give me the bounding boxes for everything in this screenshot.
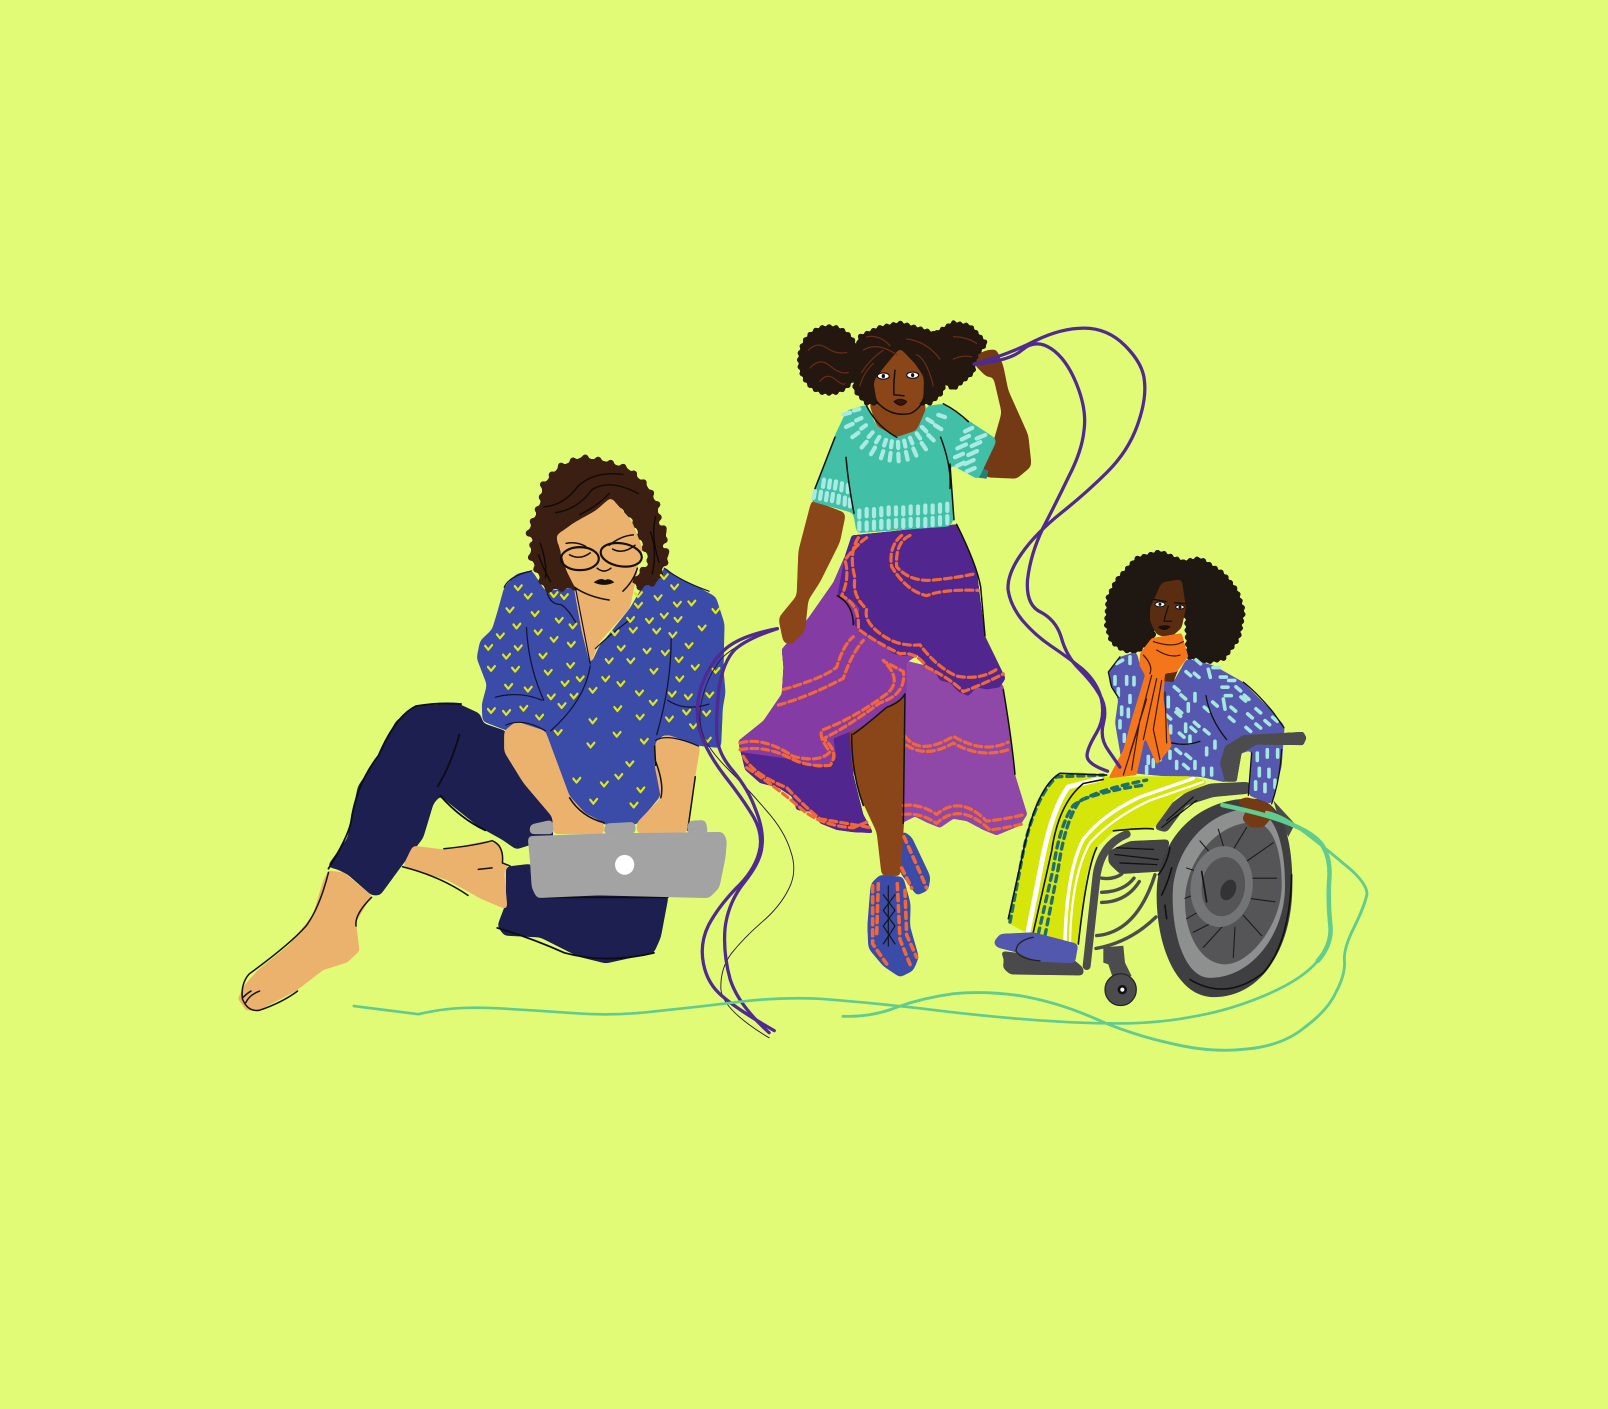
right eye: [907, 372, 919, 378]
left pupil: [882, 374, 885, 378]
guard hatching: [1162, 797, 1197, 827]
laptop keyboard edge left: [529, 820, 554, 834]
seat hatching: [1115, 848, 1158, 865]
footrest: [1000, 951, 1084, 975]
trousers: [1007, 772, 1211, 945]
forearm outlines: [570, 746, 695, 830]
wheel axle: [1217, 877, 1239, 903]
purple strand: left fine line: [700, 631, 794, 1038]
hair right: [1180, 559, 1243, 662]
face: [1150, 579, 1186, 638]
wheel spokes: [1185, 827, 1277, 958]
lips: [1158, 625, 1171, 630]
figure: woman in purple skirt: [738, 322, 1032, 977]
eyes: [1155, 602, 1184, 609]
trouser contours: [1008, 773, 1153, 944]
laptop keyboard edge right: [687, 820, 708, 834]
hair: left puff: [800, 327, 858, 393]
wheelchair: [1000, 782, 1295, 1006]
purple strand: left inner: [717, 629, 777, 1033]
sweater contours: [1108, 657, 1284, 804]
strands in overview coordinates: [354, 328, 1367, 1050]
green strand: thick end: [1222, 805, 1331, 961]
mid skirt panel: [738, 556, 927, 768]
sleeve shadow: [977, 466, 988, 479]
face: [873, 348, 924, 415]
neck: [1140, 665, 1180, 682]
shoes: [993, 932, 1078, 963]
neck and chest: [868, 402, 927, 437]
hair left: [1107, 552, 1183, 652]
leg: [848, 658, 904, 876]
green strand: long lower: [354, 961, 1318, 1023]
purple strand: left outer: [697, 629, 777, 1031]
hair: center: [855, 323, 951, 403]
shoe contour: [1016, 937, 1040, 961]
hair: right puff: [937, 322, 987, 389]
wheel rim: [1173, 809, 1285, 978]
lips: [594, 579, 614, 585]
left pupil: [1158, 603, 1161, 606]
hem ticks: [859, 504, 947, 530]
left eye: [877, 373, 889, 379]
front boot: [867, 875, 919, 977]
back boot: [900, 830, 931, 896]
collar inner row: [854, 409, 932, 448]
right pupil: [1178, 606, 1181, 609]
caster hub: [1118, 985, 1127, 994]
right sleeve ticks: [955, 428, 985, 472]
laptop logo: [615, 855, 634, 875]
wheel hub ring: [1185, 842, 1258, 931]
back dark skirt: [740, 721, 873, 833]
shirt: [477, 566, 726, 825]
laptop keyboard edge middle: [603, 822, 636, 834]
right forearm: [637, 735, 700, 833]
armrest: [1220, 732, 1307, 782]
figure: woman in wheelchair: [993, 552, 1307, 1006]
trouser teal stitches: [1010, 775, 1147, 936]
trouser white stripes: [1028, 778, 1203, 942]
seat frame and guard: [1154, 782, 1250, 833]
leg outlines: [328, 703, 668, 959]
caster wheel: [1105, 974, 1136, 1006]
lower leg trousers: [497, 864, 669, 964]
hand: [1237, 797, 1275, 827]
left forearm: [504, 721, 604, 834]
chest and neck: [571, 568, 638, 666]
near foot: [238, 871, 372, 1011]
blouse: [810, 404, 997, 533]
left sleeve ticks: [814, 480, 850, 506]
scarf: [1108, 633, 1188, 778]
skirt contour lines: [837, 524, 1015, 823]
purple strand: right inner: [974, 344, 1120, 767]
blouse contour lines: [815, 404, 968, 520]
foot outlines: [242, 841, 510, 1010]
figure: woman with laptop: [238, 457, 727, 1011]
raised leg trousers: [327, 703, 553, 895]
hair middle: [1152, 564, 1190, 618]
caster hub centre: [1120, 988, 1124, 992]
lower right skirt panel: [897, 658, 1027, 835]
sweater pattern: pale dashes: [1115, 657, 1278, 792]
nose: [1153, 599, 1185, 621]
wheel hub: [1198, 854, 1249, 919]
right eye: [1176, 605, 1184, 609]
wheel tyre: [1157, 799, 1292, 997]
boot laces: [883, 886, 895, 946]
hair highlights: [808, 336, 977, 386]
hair strands: [539, 474, 659, 582]
green strand: looping: [843, 812, 1367, 1050]
hair: [1107, 552, 1243, 662]
nose and jaw: [877, 370, 924, 414]
tyre hatching: [1158, 848, 1292, 989]
caster fork: [1103, 946, 1132, 980]
sweater: [1108, 652, 1285, 804]
raised arm: [973, 349, 1032, 479]
far foot: [403, 841, 511, 910]
left arm: [778, 500, 846, 645]
left eye: [1155, 602, 1165, 607]
frame hoops: [1096, 874, 1156, 948]
shirt pattern: yellow chevrons: [485, 574, 719, 807]
front frame: [1087, 834, 1127, 966]
blouse stitches: [814, 409, 985, 530]
eyes: [877, 372, 919, 379]
laptop lid: [528, 832, 727, 898]
purple strand: right outer: [974, 328, 1145, 771]
glasses and facial features: [561, 535, 643, 600]
rear fender: [1273, 800, 1295, 837]
collar outer row: [843, 413, 945, 461]
seat cushion: [1108, 839, 1170, 874]
wheel disc: [1185, 822, 1282, 964]
shirt fold lines: [496, 568, 709, 746]
hair: [528, 457, 669, 590]
scarf fold lines: [1123, 642, 1183, 775]
lips: [894, 399, 907, 405]
boot stitches: [873, 837, 927, 968]
right pupil: [911, 373, 914, 377]
laptop: [528, 820, 727, 898]
face: [556, 497, 643, 600]
top skirt panel: [837, 524, 1006, 696]
skirt stitches: [740, 535, 1025, 830]
